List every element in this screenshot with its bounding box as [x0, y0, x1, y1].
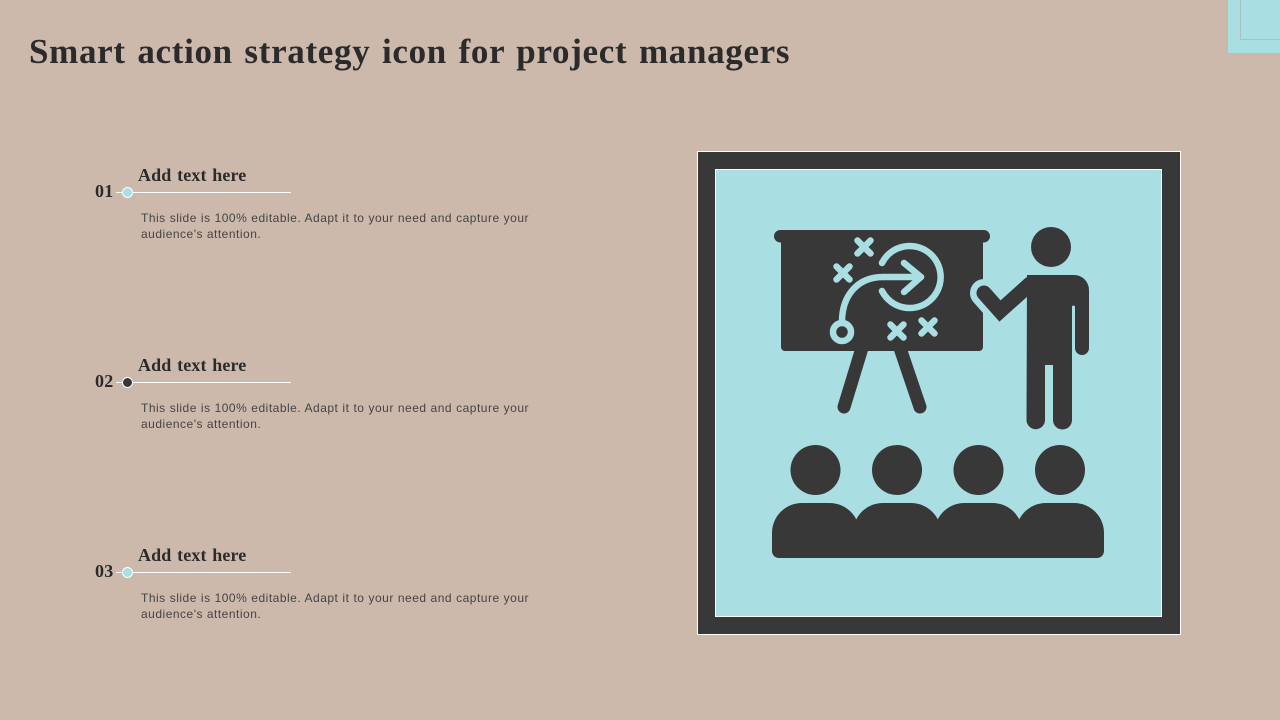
number 02: 02 — [95, 371, 114, 391]
connector line 03 — [116, 572, 291, 573]
marker dot 03 — [122, 567, 133, 578]
description 02: This slide is 100% editable. Adapt it to your need and capture your audience's attention. — [141, 401, 529, 431]
heading 02: Add text here — [138, 355, 246, 375]
corner accent — [1228, 0, 1280, 53]
heading 01: Add text here — [138, 165, 246, 185]
item 03 — [95, 545, 529, 621]
connector line 01 — [116, 192, 291, 193]
number 03: 03 — [95, 561, 114, 581]
icon: presentation board — [774, 230, 990, 407]
icon: presenter — [984, 227, 1089, 430]
description 01: This slide is 100% editable. Adapt it to your need and capture your audience's attention. — [141, 211, 529, 241]
inner light panel — [715, 169, 1162, 617]
item 02 — [95, 355, 529, 431]
icon: audience — [772, 445, 1104, 558]
icon panel — [697, 151, 1181, 635]
heading 03: Add text here — [138, 545, 246, 565]
item 01 — [95, 165, 529, 241]
description 03: This slide is 100% editable. Adapt it to your need and capture your audience's attention. — [141, 591, 529, 621]
marker dot 02 — [122, 377, 133, 388]
marker dot 01 — [122, 187, 133, 198]
number 01: 01 — [95, 181, 114, 201]
connector line 02 — [116, 382, 291, 383]
title: Smart action strategy icon for project managers — [29, 32, 790, 71]
